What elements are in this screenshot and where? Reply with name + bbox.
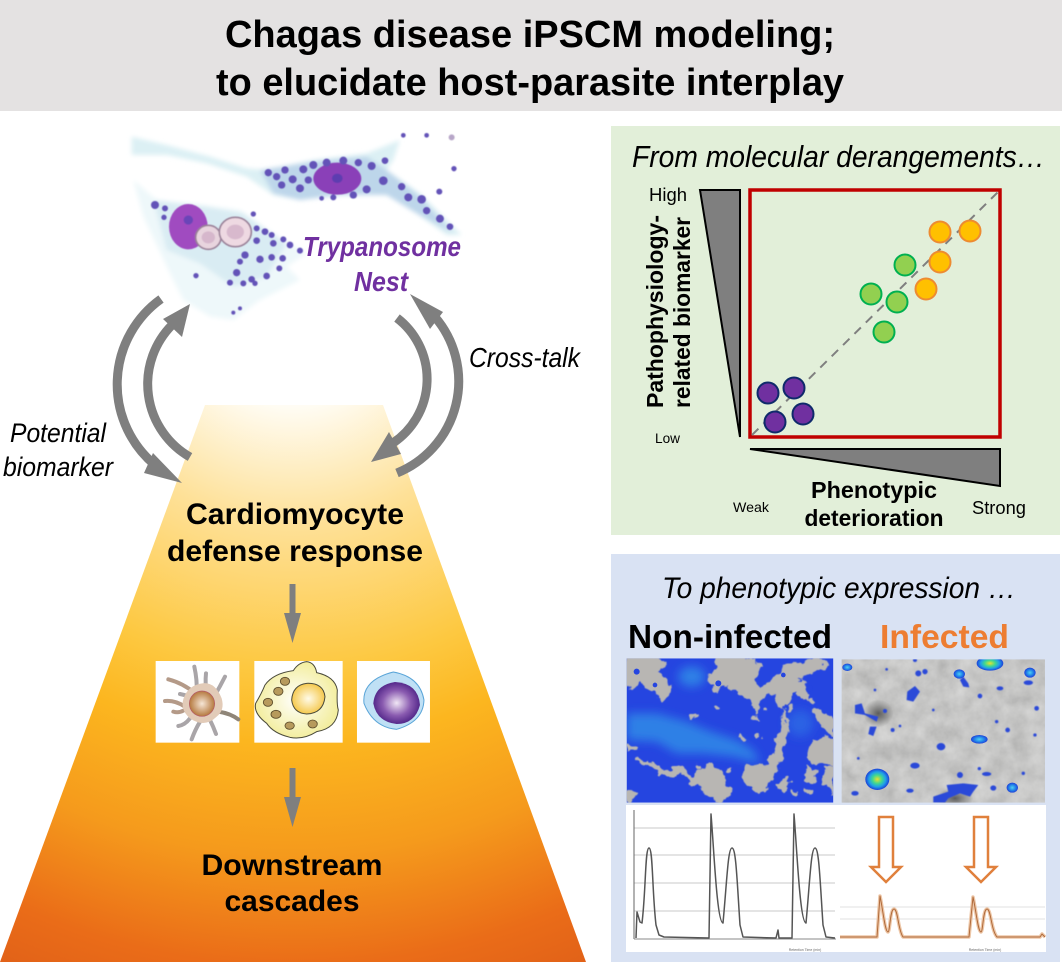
scatter plot [750,190,1000,437]
heading: downstream cascades: Downstream [202,849,382,882]
y axis labels: Low [655,431,680,446]
panel: cardiomyocyte defense pyramid [0,405,586,962]
heading: cardiomyocyte defense response: defense response [167,535,423,568]
label: trypanosome nest: Trypanosome [303,231,461,262]
label: potential biomarker: Potential [10,418,107,448]
x axis labels: Phenotypic [811,477,937,503]
icon: lymphocyte [357,661,430,743]
x axis wedge [750,449,1000,486]
title banner: to elucidate host-parasite interplay [216,62,844,104]
image: infected cardiomyocytes micrograph [132,133,462,320]
chart: non-infected trace [626,805,836,952]
icon: macrophage [254,661,343,743]
label: infected: Infected [880,619,1009,656]
label: trypanosome nest [303,231,461,297]
panel: molecular derangements [611,126,1060,535]
arrow: reduced peak 1 [871,817,901,882]
label: non-infected: Non-infected [628,619,832,656]
label: cross-talk: Cross-talk [469,342,582,373]
heading: downstream cascades: cascades [224,885,360,918]
heading: downstream cascades [202,849,382,918]
arrow: defense response to immune cells [284,584,301,643]
x axis labels: Weak [733,499,770,515]
chart: infected trace [836,805,1046,952]
icon: dendritic cell [156,661,239,743]
x axis labels: deterioration [804,505,944,531]
y axis labels: related biomarker [669,217,695,408]
y axis labels [642,184,695,446]
heading: to phenotypic expression: To phenotypic expression … [662,572,1016,605]
heading: cardiomyocyte defense response [167,498,423,568]
x axis labels [733,477,1026,531]
image: non-infected fluorescence [627,658,833,803]
label: potential biomarker: biomarker [3,452,114,482]
heading: cardiomyocyte defense response: Cardiomyocyte [186,498,404,531]
arrow: immune cells to cascades [284,768,301,827]
y axis wedge [700,190,740,437]
title banner [0,0,1062,111]
y axis labels: High [649,184,687,205]
image: infected fluorescence [842,656,1045,809]
arrow: reduced peak 2 [966,817,996,882]
y axis labels: Pathophysiology- [642,215,668,408]
panel: phenotypic expression [611,554,1060,962]
chart: infected trace: Retention Time (min) [969,948,1001,952]
label: potential biomarker [3,418,114,482]
label: trypanosome nest: Nest [354,266,409,297]
x axis labels: Strong [972,498,1026,518]
arrows: left potential biomarker pair [117,299,190,483]
title banner: Chagas disease iPSCM modeling; [225,14,835,56]
chart: non-infected trace: Retention Time (min) [789,948,821,952]
arrows: right cross-talk pair [371,294,459,473]
